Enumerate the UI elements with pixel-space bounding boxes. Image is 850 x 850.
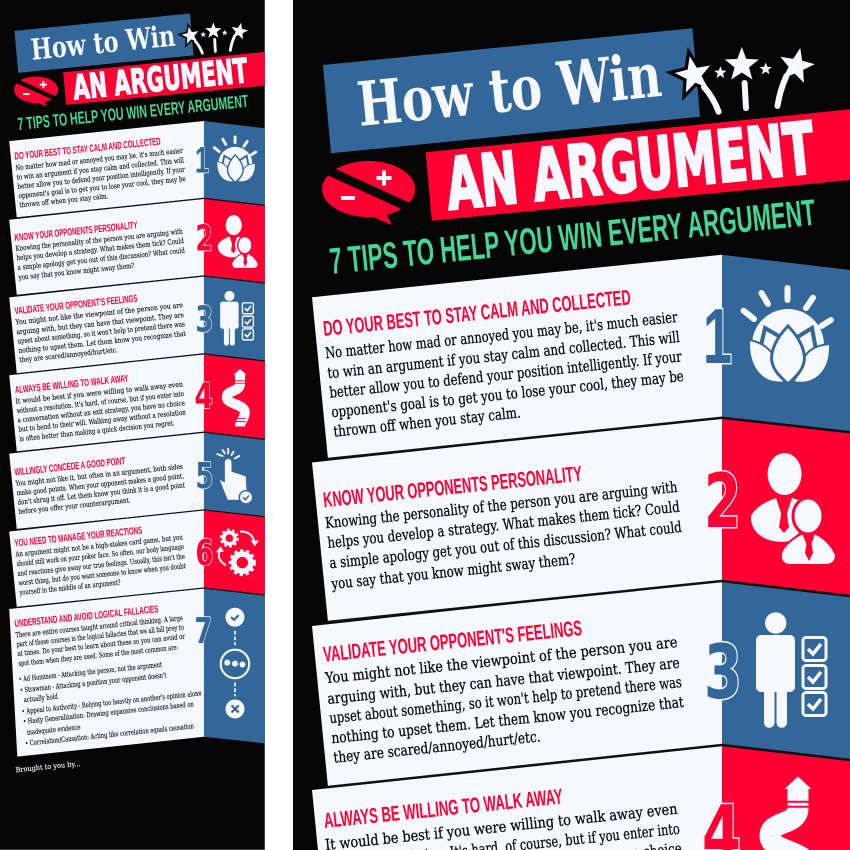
panel: tip 4: is often better than making a quick decision you regret. [19, 418, 175, 443]
panel: tip 1: No matter how mad or annoyed you may be, it's much easier [15, 146, 184, 172]
panel: tip 2 [9, 198, 265, 295]
panel: tip 3: arguing with, but they can have that viewpoint. They are [16, 310, 184, 336]
panel: tip 1: to win an argument if you stay calm and collected. This will [16, 155, 185, 182]
panel: tip 1: opponent's goal is to get you to lose your cool, they may be [18, 174, 186, 200]
panel: zoomed-out full infographic [0, 0, 265, 850]
panel: tip 3: You might not like the viewpoint of the person you are [14, 300, 183, 327]
panel: tip 5: don't shrug it off. Let them know you think it is a good point [17, 480, 185, 507]
panel: tip 5: You might not like it, but often in an argument, both sides [14, 462, 183, 488]
panel: tip 1: 1 [195, 138, 209, 180]
panel: tip 7: • Hasty Generalization: Drawing expansive conclusions based on [23, 699, 194, 726]
panel: tip 3: they are scared/annoyed/hurt/etc. [19, 345, 118, 364]
panel: tip 3 detail: nothing to upset them. Let them know you recognize that [331, 693, 685, 747]
panel: tip 1 [9, 121, 265, 218]
panel: tip 3: upset about something, so it won't help to pretend there was [17, 319, 185, 346]
tagline: 7 TIPS TO HELP YOU WIN EVERY ARGUMENT [17, 91, 249, 134]
panel: tip 3 detail: arguing with, but they can have that viewpoint. They are [327, 654, 681, 708]
panel: tip 7: • Ad Hominem - Attacking the person, not the argument [18, 660, 162, 684]
footer credit: Brought to you by... [15, 759, 81, 774]
panel: tip 3: 3 [195, 300, 213, 341]
panel: tip 4: ALWAYS BE WILLING TO WALK AWAY [14, 374, 129, 396]
panel: zoomed-in detail [293, 0, 850, 850]
panel: tip 1: thrown off when you stay calm. [19, 191, 109, 209]
panel: tip 7: • Appeal to Authority - Relying too heavily on another's opinion alone [21, 688, 202, 716]
panel: tip 7: UNDERSTAND AND AVOID LOGICAL FALLACIES [14, 604, 159, 630]
panel: tip 1: better allow you to defend your position intelligently. If your [17, 165, 186, 191]
panel: tip 1 detail: better allow you to defend your position intelligently. If your [329, 347, 683, 402]
panel: tip 3 detail: upset about something, so it won't help to pretend there was [329, 673, 683, 727]
panel: tip 6: YOU NEED TO MANAGE YOUR REACTIONS [14, 525, 143, 550]
panel: tip 2 detail: Knowing the personality of the person you are arguing with [324, 478, 678, 532]
title: How to Win [354, 40, 665, 141]
panel: tip 4: a conversation without an exit strategy, you have no choice [17, 398, 185, 425]
panel: tip 7: actually hold [23, 692, 58, 704]
panel: tip 3 detail [312, 581, 850, 787]
header graphics [14, 13, 265, 107]
panel: tip 2 detail: 2 [704, 457, 741, 545]
panel: tip 3 [9, 276, 265, 374]
panel: tip 3 detail: they are scared/annoyed/hurt/etc. [333, 727, 541, 767]
panel: tip 6: and reactions give away our true feelings. Usually, this isn't the [17, 552, 185, 578]
panel: tip 2: helps you develop a strategy. What makes them tick? Could [16, 236, 185, 262]
panel: tip 1 detail [312, 255, 850, 459]
panel: tip 3 detail: VALIDATE YOUR OPPONENT'S FEELINGS [322, 616, 583, 667]
panel: tip 5: WILLINGLY CONCEDE A GOOD POINT [14, 456, 126, 478]
panel: tip 4: but to bend to their will. Walking away without a resolution [18, 407, 186, 434]
panel: tip 1 detail: No matter how mad or annoyed you may be, it's much easier [324, 308, 679, 362]
panel: tip 4: 4 [194, 376, 213, 417]
panel: tip 1 detail: DO YOUR BEST TO STAY CALM AND COLLECTED [322, 285, 632, 341]
panel: tip 2: you say that you know might sway them? [17, 261, 135, 282]
panel: tip 2: a simple apology get you out of this discussion? What could [17, 246, 186, 272]
panel: tip 6 [9, 510, 265, 608]
panel: tip 6: yourself in the middle of an argument? [18, 578, 121, 597]
panel: tip 2 detail: a simple apology get you out of this discussion? What could [329, 518, 683, 572]
panel: tip 3: VALIDATE YOUR OPPONENT'S FEELINGS [14, 294, 138, 317]
panel: tip 2 detail: KNOW YOUR OPPONENTS PERSONALITY [322, 462, 583, 512]
panel: tip 7: • Strawman - Attacking a position your opponent doesn't [19, 670, 167, 695]
panel: tip 2: Knowing the personality of the person you are arguing with [15, 227, 184, 253]
panel: tip 4: without a resolution. It's hard, of course, but if you enter into [16, 389, 184, 415]
panel: tip 7 [9, 588, 265, 757]
panel: tip 6: should still work on your poker face. So often, our body language [16, 542, 184, 568]
panel: tip 5: make good points. When your opponent makes a good point, [16, 471, 184, 497]
panel: tip 5: before you offer your counterargument. [18, 495, 131, 516]
panel: tip 4 [9, 354, 265, 452]
panel: tip 7: spot them when they are used. Some of the most common are: [18, 642, 179, 668]
panel: tip 1: DO YOUR BEST TO STAY CALM AND COLLECTED [14, 137, 161, 163]
panel: tip 4 detail: ALWAYS BE WILLING TO WALK AWAY [323, 784, 564, 833]
panel: tip 3 detail: You might not like the viewpoint of the person you are [323, 633, 678, 687]
panel: tip 2 detail [312, 418, 850, 622]
panel: tip 6: 6 [195, 533, 213, 574]
panel: tip 6: An argument might not be a high-stakes card game, but you [14, 532, 184, 559]
panel: tip 7: inadequate evidence [27, 722, 81, 737]
panel: tip 3: nothing to upset them. Let them know you recognize that [18, 329, 186, 355]
panel: tip 2: KNOW YOUR OPPONENTS PERSONALITY [14, 220, 138, 244]
panel: tip 6: worst thing, but do you want someone to know when you doubt [18, 561, 186, 587]
panel: tip 2: 2 [195, 218, 213, 259]
panel: tip 1 detail: thrown off when you stay calm. [333, 403, 521, 441]
panel: tip 7: There are entire courses taught around critical thinking. A large [15, 613, 183, 639]
title: How to Win [29, 19, 177, 67]
panel: tip 1 detail: 1 [703, 292, 732, 380]
panel: tip 7: part of these courses is the logical fallacies that we all fall prey to [16, 622, 184, 649]
panel: tip 1 detail: to win an argument if you stay calm and collected. This will [327, 328, 681, 382]
header graphics [322, 28, 850, 225]
panel: tip 7: • Correlation/Causation: Acting like correlation equals causation [25, 721, 195, 748]
panel: tip 2 detail: helps you develop a strategy. What makes them tick? Could [327, 498, 681, 552]
panel: tip 5 [9, 432, 265, 530]
panel: tip 7: 7 [194, 611, 212, 652]
panel: tip 7: at times. Do your best to learn about these so you can avoid or [17, 632, 186, 658]
panel: tip 3 detail: 3 [704, 628, 742, 716]
panel: tip 1 detail: opponent's goal is to get you to lose your cool, they may be [331, 367, 685, 421]
panel: tip 2 detail: you say that you know might sway them? [330, 550, 576, 593]
panel: tip 5: 5 [195, 456, 213, 497]
panel: tip 4: It would be best if you were willing to walk away even [15, 379, 184, 406]
subtitle banner text: AN ARGUMENT [71, 51, 249, 107]
panel: tip 4 detail [312, 745, 850, 850]
